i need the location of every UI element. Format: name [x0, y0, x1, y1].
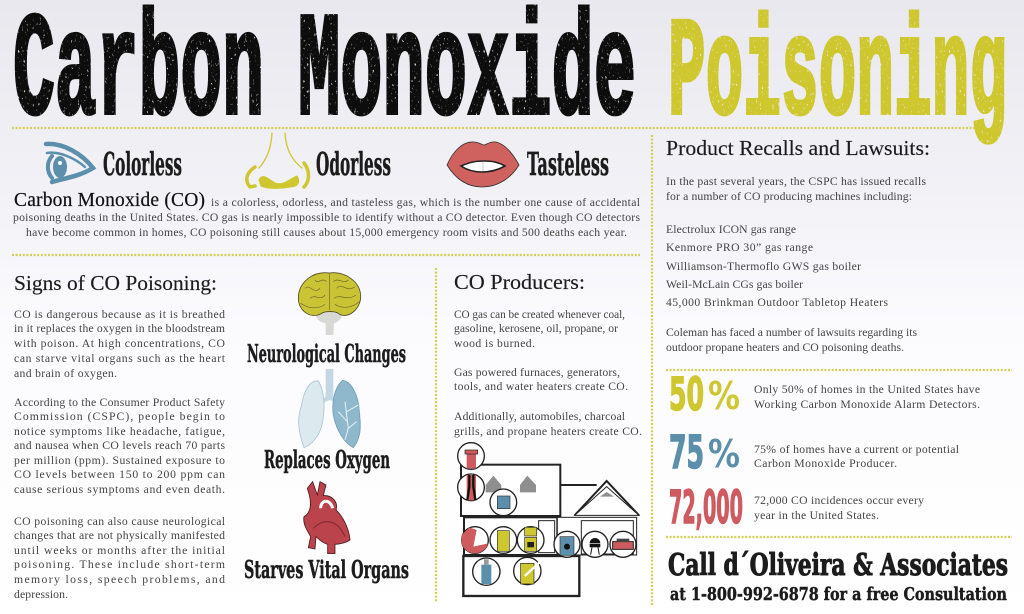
stat: 75%: 75% of homes have a current or potential — [754, 443, 960, 456]
producers body text — [454, 308, 642, 438]
recalls body text: outdoor propane heaters and CO poisoning deaths. — [666, 341, 904, 354]
stat: 75%: % — [708, 432, 740, 476]
panel: signs of CO poisoning — [14, 271, 226, 601]
recalls body text: 45,000 Brinkman Outdoor Tabletop Heaters — [666, 296, 888, 309]
stat: 72,000: year in the United States. — [754, 509, 879, 522]
heading: producers: CO Producers: — [454, 270, 585, 294]
intro text — [13, 190, 641, 239]
intro text: have become common in homes, CO poisoning still causes about 15,000 emergency room visits and 500 deaths each year. — [26, 226, 627, 239]
intro text: is a colorless, odorless, and tasteless gas, which is the number one cause of accidental — [211, 196, 641, 209]
stat: 75%: Carbon Monoxide Producer. — [754, 457, 897, 470]
call to action — [668, 548, 1008, 605]
signs body text: CO levels between 150 to 200 ppm can — [14, 468, 225, 481]
intro text: poisoning deaths in the United States. CO gas is nearly impossible to identify without a CO detector. Even though CO detectors — [13, 211, 640, 224]
signs body text: cause serious symptoms and even death. — [14, 483, 225, 496]
signs body text: until weeks or months after the initial — [14, 544, 226, 557]
signs body text: memory loss, speech problems, and — [14, 573, 225, 586]
producers body text: CO gas can be created whenever coal, — [454, 308, 625, 321]
icon: house illustration — [458, 443, 639, 596]
icon: nose — [247, 133, 309, 188]
signs body text: changes that are not physically manifested — [14, 529, 225, 542]
signs body text: and nausea when CO levels reach 70 parts — [14, 439, 225, 452]
stat: 72,000 — [669, 481, 924, 534]
stat: 50%: % — [708, 374, 740, 418]
signs body text: According to the Consumer Product Safety — [14, 396, 225, 409]
stat: 50%: Working Carbon Monoxide Alarm Detectors. — [754, 398, 980, 411]
signs body text — [14, 308, 226, 601]
signs body text: notice symptoms like headache, fatigue, — [14, 425, 225, 438]
recalls body text: Electrolux ICON gas range — [666, 223, 796, 236]
signs body text: CO is dangerous because as it is breathed — [14, 308, 225, 321]
signs body text: in it replaces the oxygen in the bloodstream — [14, 322, 225, 335]
signs body text: per million (ppm). Sustained exposure to — [14, 454, 225, 467]
text: Colorless — [103, 145, 182, 183]
stat: 50%: Only 50% of homes in the United States have — [754, 383, 980, 396]
heading: signs: Signs of CO Poisoning: — [14, 271, 217, 295]
signs body text: Commission (CSPC), people begin to — [14, 410, 225, 423]
stat: 50% — [669, 368, 980, 421]
recalls body text: In the past several years, the CSPC has issued recalls — [666, 175, 926, 188]
stat: 75%: 75 — [669, 426, 704, 479]
text: Odorless — [316, 145, 391, 183]
recalls body text: Kenmore PRO 30” gas range — [666, 241, 813, 254]
label: tasteless: Tasteless — [527, 145, 609, 183]
producers body text: grills, and propane heaters create CO. — [454, 425, 642, 438]
stat: 75% — [669, 426, 960, 479]
recalls body text — [666, 175, 926, 354]
recalls body text: Weil-McLain CGs gas boiler — [666, 278, 803, 291]
producers body text: Gas powered furnaces, generators, — [454, 366, 620, 379]
heading: recalls: Product Recalls and Lawsuits: — [666, 136, 930, 160]
producers body text: gasoline, kerosene, oil, propane, or — [454, 322, 618, 335]
signs body text: with poison. At high concentrations, CO — [14, 337, 225, 350]
recalls body text: for a number of CO producing machines including: — [666, 190, 912, 203]
icon: lungs — [299, 369, 360, 448]
icon: eye — [46, 144, 93, 182]
stat: 72,000: 72,000 CO incidences occur every — [754, 494, 924, 507]
recalls body text: Coleman has faced a number of lawsuits regarding its — [666, 326, 917, 339]
signs body text: and brain of oxygen. — [14, 367, 117, 380]
signs body text: CO poisoning can also cause neurological — [14, 515, 226, 528]
stat: 72,000: 72,000 — [669, 481, 743, 534]
signs body text: can starve vital organs such as the heart — [14, 352, 226, 365]
label: replaces oxygen: Replaces Oxygen — [264, 445, 390, 474]
producers body text: wood is burned. — [454, 337, 535, 350]
intro text: Carbon Monoxide (CO) — [14, 190, 205, 211]
recalls body text: Williamson-Thermoflo GWS gas boiler — [666, 260, 861, 273]
signs body text: depression. — [14, 588, 68, 601]
icon: heart — [304, 482, 350, 554]
stat: 50%: 50 — [669, 368, 704, 421]
producers body text: Additionally, automobiles, charcoal — [454, 410, 626, 423]
producers body text: tools, and water heaters create CO. — [454, 380, 628, 393]
icon: brain — [298, 273, 361, 335]
signs body text: poisoning. These include short-term — [14, 558, 225, 571]
panel: product recalls — [666, 136, 930, 354]
panel: CO producers — [454, 270, 642, 438]
icon: lips — [447, 142, 519, 187]
label: starves vital organs: Starves Vital Organs — [244, 555, 409, 584]
label: neurological changes: Neurological Changes — [247, 339, 406, 368]
